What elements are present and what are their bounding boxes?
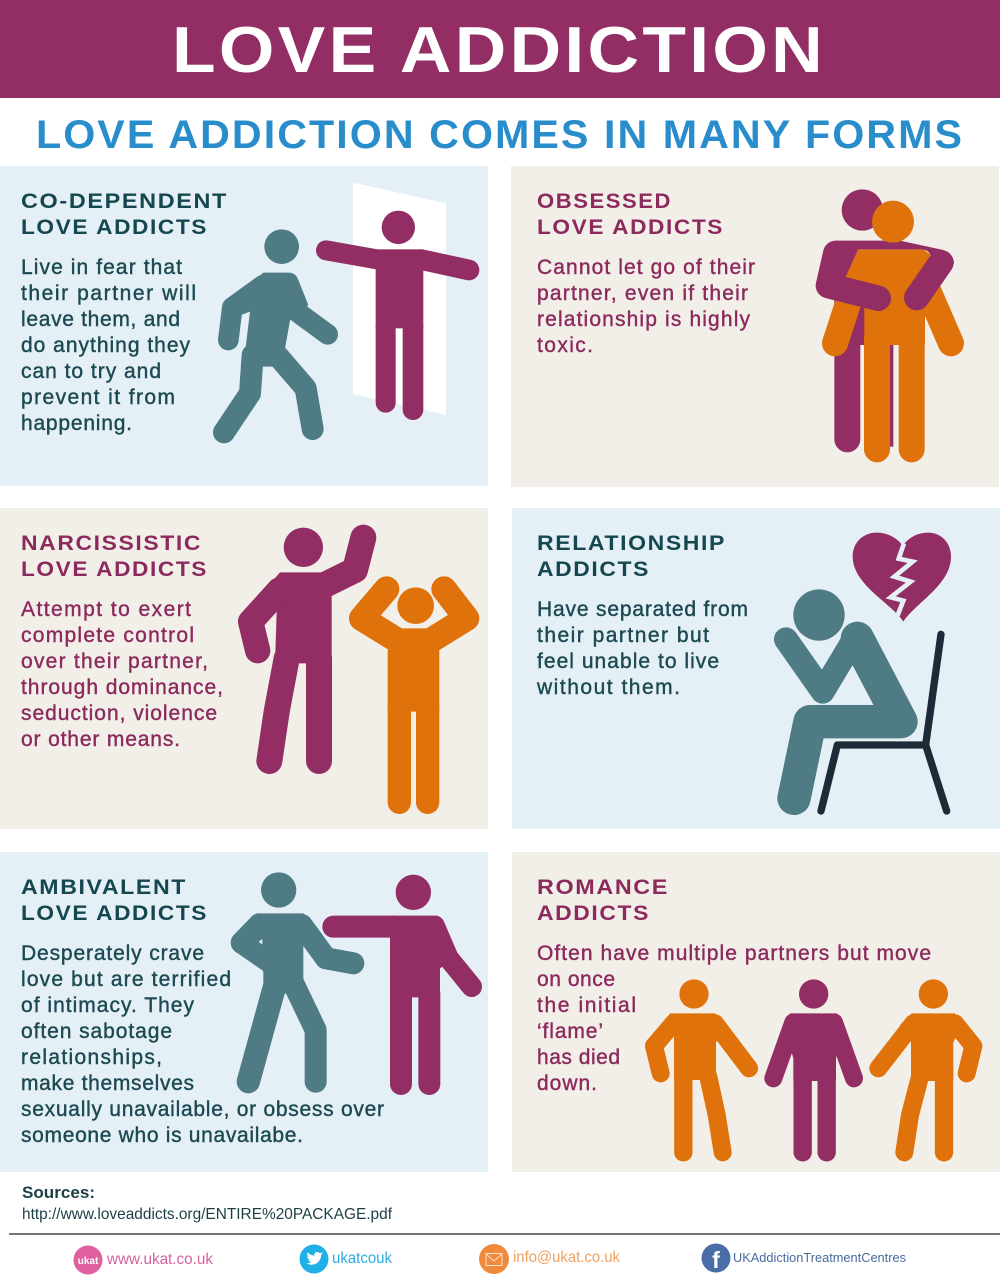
heading: narcissistic: LOVE ADDICTS: [21, 557, 208, 581]
heading: co-dependent: CO-DEPENDENT: [21, 189, 228, 213]
footer: twitter: [300, 1244, 393, 1274]
sources: Sources:: [22, 1183, 95, 1202]
text: ambivalent description: often sabotage: [21, 1020, 172, 1043]
text: romance description: on once: [537, 968, 615, 991]
heading: relationship: RELATIONSHIP: [537, 531, 726, 555]
heading: ambivalent: [21, 875, 208, 925]
footer: email: [479, 1244, 621, 1274]
text: romance description: Often have multiple partners but move: [537, 942, 931, 965]
text: narcissistic description: or other means.: [21, 728, 180, 751]
text: obsessed description: toxic.: [537, 334, 593, 357]
text: relationship description: without them.: [536, 676, 680, 699]
panel: narcissistic love addicts: [0, 508, 488, 829]
heading: co-dependent: LOVE ADDICTS: [21, 215, 208, 239]
text: narcissistic description: [21, 598, 223, 751]
text: co-dependent description: prevent it from: [21, 386, 175, 409]
heading: ambivalent: AMBIVALENT: [21, 875, 187, 899]
text: co-dependent description: do anything they: [21, 334, 190, 357]
subtitle: LOVE ADDICTION COMES IN MANY FORMS: [36, 113, 964, 157]
text: relationship description: Have separated from: [537, 598, 748, 621]
text: co-dependent description: their partner will: [21, 282, 196, 305]
heading: ambivalent: LOVE ADDICTS: [21, 901, 208, 925]
footer: website: www.ukat.co.uk: [106, 1251, 214, 1268]
text: relationship description: their partner but: [537, 624, 709, 647]
footer: twitter: ukatcouk: [332, 1250, 393, 1267]
text: obsessed description: Cannot let go of their: [537, 256, 755, 279]
heading: obsessed: [537, 189, 724, 239]
text: romance description: the initial: [537, 994, 636, 1017]
text: ambivalent description: relationships,: [21, 1046, 162, 1069]
text: ambivalent description: make themselves: [21, 1072, 194, 1095]
text: obsessed description: relationship is highly: [537, 308, 750, 331]
panel: relationship addicts: [512, 508, 1000, 829]
text: romance description: [537, 942, 931, 1095]
icon: two figures hugging: [828, 189, 954, 449]
text: co-dependent description: happening.: [21, 412, 132, 435]
icon: seated figure with broken heart: [786, 533, 951, 811]
heading: romance: ROMANCE: [537, 875, 669, 899]
heading: narcissistic: NARCISSISTIC: [21, 531, 202, 555]
icon: figure pushing another figure away: [240, 872, 472, 1084]
text: romance description: down.: [537, 1072, 597, 1095]
text: ambivalent description: Desperately crave: [21, 942, 204, 965]
text: narcissistic description: over their partner,: [21, 650, 208, 673]
footer: website: ukat: [78, 1256, 99, 1267]
text: co-dependent description: [21, 256, 196, 435]
sources: [22, 1183, 393, 1223]
text: relationship description: [536, 598, 748, 699]
heading: romance: [537, 875, 669, 925]
text: ambivalent description: someone who is unavailabe.: [21, 1124, 303, 1147]
footer: email: info@ukat.co.uk: [513, 1249, 621, 1266]
icon: three standing figures: [653, 979, 973, 1152]
text: co-dependent description: can to try and: [21, 360, 161, 383]
text: narcissistic description: seduction, violence: [21, 702, 217, 725]
footer: website: [74, 1246, 214, 1274]
text: ambivalent description: [21, 942, 384, 1147]
header banner: [0, 0, 1000, 98]
panel: obsessed love addicts: [511, 166, 999, 487]
panel: co-dependent love addicts: [0, 166, 488, 486]
text: obsessed description: partner, even if their: [537, 282, 748, 305]
heading: romance: ADDICTS: [537, 901, 650, 925]
footer: facebook: [702, 1244, 906, 1273]
text: obsessed description: [537, 256, 755, 357]
heading: obsessed: OBSESSED: [537, 189, 672, 213]
text: co-dependent description: Live in fear that: [21, 256, 182, 279]
heading: relationship: [537, 531, 726, 581]
icon: figure walking away from figure in doorway: [224, 183, 469, 432]
sources: http://www.loveaddicts.org/ENTIRE%20PACKAGE.pdf: [22, 1206, 393, 1223]
panel: ambivalent love addicts: [0, 852, 488, 1172]
title: LOVE ADDICTION: [172, 13, 826, 86]
heading: relationship: ADDICTS: [537, 557, 650, 581]
footer: facebook: UKAddictionTreatmentCentres: [733, 1250, 906, 1265]
heading: obsessed: LOVE ADDICTS: [537, 215, 724, 239]
text: ambivalent description: sexually unavailable, or obsess over: [21, 1098, 384, 1121]
panel: romance addicts: [512, 852, 1000, 1172]
text: narcissistic description: through dominance,: [21, 676, 223, 699]
text: romance description: ‘flame’: [537, 1020, 603, 1043]
text: narcissistic description: Attempt to exert: [21, 598, 191, 621]
text: ambivalent description: of intimacy. They: [21, 994, 194, 1017]
heading: narcissistic: [21, 531, 208, 581]
text: ambivalent description: love but are terrified: [21, 968, 231, 991]
text: co-dependent description: leave them, and: [21, 308, 180, 331]
text: narcissistic description: complete control: [21, 624, 194, 647]
footer: facebook: f: [712, 1247, 720, 1273]
text: romance description: has died: [537, 1046, 620, 1069]
icon: dominant figure and submissive figure: [240, 528, 467, 802]
text: relationship description: feel unable to live: [537, 650, 719, 673]
heading: co-dependent: [21, 189, 228, 239]
